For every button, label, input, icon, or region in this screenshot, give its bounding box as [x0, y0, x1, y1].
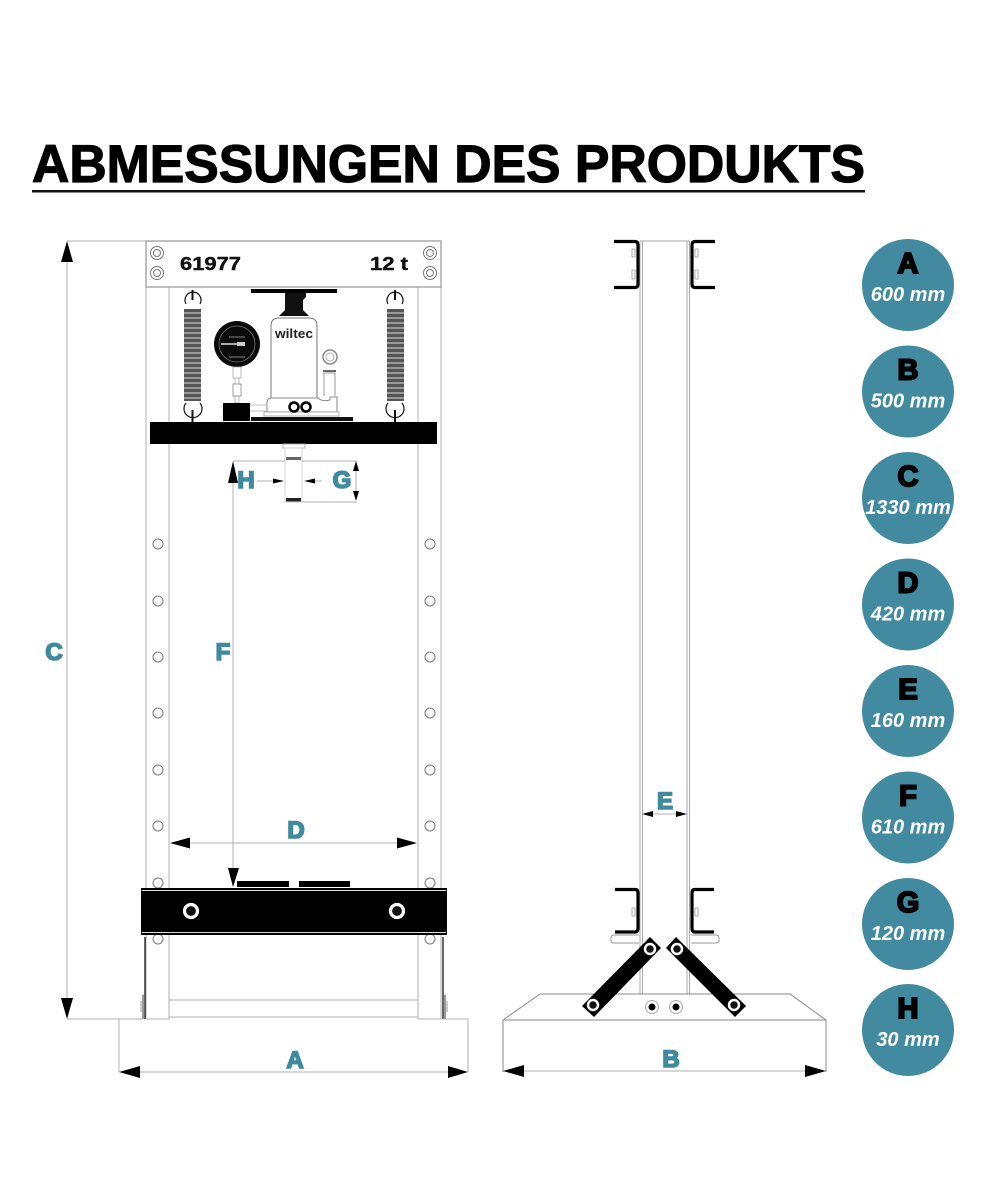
left spring: [184, 290, 202, 422]
badge G: [862, 878, 954, 970]
badge A: A: [898, 248, 919, 280]
dimension C: [45, 241, 146, 1019]
press plates: [237, 881, 350, 887]
dimension H: H: [237, 467, 255, 494]
pressure gauge: [214, 321, 267, 421]
upper right bracket: [692, 242, 715, 288]
badge D: 420 mm: [870, 604, 945, 626]
dimension B: B: [662, 1046, 680, 1073]
badge F: F: [899, 780, 917, 812]
badge H: [862, 984, 954, 1076]
dimension C: C: [45, 639, 63, 666]
support shelf: [611, 935, 719, 943]
dimension E: [642, 788, 687, 817]
title: ABMESSUNGEN DES PRODUKTS: [32, 135, 865, 194]
lower right bracket: [692, 890, 714, 932]
lower bolts: [632, 908, 698, 916]
badge D: [862, 558, 954, 650]
upper bolts: [632, 249, 698, 279]
front view of press: [119, 241, 468, 1072]
badge H: H: [898, 993, 918, 1025]
badge H: 30 mm: [876, 1029, 940, 1051]
badge E: 160 mm: [871, 710, 945, 732]
base bolts: [646, 1000, 682, 1014]
dimension F: [216, 461, 285, 887]
badge F: [862, 772, 954, 864]
dimension A: [119, 1047, 468, 1078]
badge C: [862, 452, 954, 544]
top plate: 12 t: [370, 254, 408, 274]
lower left bracket: [615, 890, 638, 932]
lower black beam: [141, 888, 447, 935]
central column: [640, 241, 690, 994]
side view of press: [503, 241, 826, 1072]
black head beam: [150, 422, 437, 444]
badge C: C: [898, 461, 919, 493]
dimension H: [237, 467, 322, 494]
piston ram: [283, 444, 305, 502]
top plate: [146, 241, 441, 287]
badge C: 1330 mm: [865, 497, 951, 519]
right diagonal strut: [666, 937, 746, 1017]
badge E: [862, 665, 954, 757]
dimension G: G: [333, 467, 351, 494]
dimension D: [170, 817, 417, 848]
base block: [503, 994, 826, 1072]
base: [119, 995, 468, 1072]
badge G: 120 mm: [871, 923, 945, 945]
bottle jack: wiltec: [274, 326, 313, 341]
dimension F: F: [216, 639, 230, 666]
dimension G: [302, 461, 359, 502]
badge F: 610 mm: [871, 816, 945, 838]
top plate: 61977: [180, 254, 241, 274]
badge A: 600 mm: [871, 284, 945, 306]
column holes: [153, 539, 435, 944]
frame columns: [145, 287, 443, 1019]
dimension A: A: [286, 1047, 304, 1074]
badge B: [862, 346, 954, 438]
badge B: B: [898, 354, 918, 386]
badge G: G: [897, 887, 919, 919]
badge D: D: [898, 568, 918, 600]
badge E: E: [898, 674, 918, 706]
badge B: 500 mm: [871, 390, 945, 412]
dimension B: [503, 1046, 826, 1077]
left diagonal strut: [582, 937, 661, 1017]
bottle jack: [251, 289, 353, 421]
upper left bracket: [614, 242, 638, 288]
right spring: [386, 290, 404, 422]
dimension D: D: [287, 817, 305, 844]
badge A: [862, 239, 954, 331]
dimension E: E: [657, 788, 673, 815]
